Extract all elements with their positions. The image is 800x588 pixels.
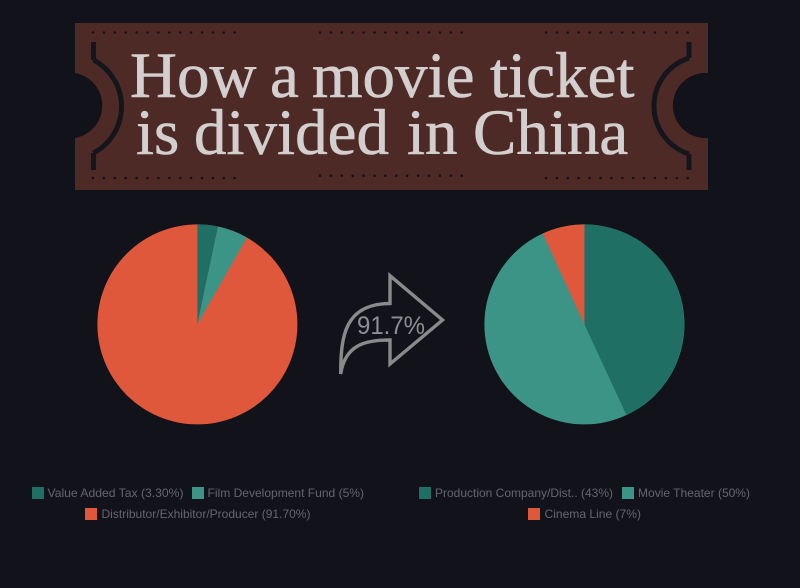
ticket banner [75, 23, 708, 190]
title: How [130, 40, 256, 112]
title: divided [194, 97, 389, 169]
legend: left chart: Film Development Fund (5%) [208, 486, 364, 500]
legend: right chart: Production Company/Dist.. (43%) [435, 486, 613, 500]
pie chart: ticket split [97, 224, 297, 424]
title: a [270, 40, 299, 112]
title: China [473, 97, 628, 169]
title [130, 40, 634, 169]
right ticket bracket [654, 42, 689, 170]
legend: right chart: Cinema Line (7%) [544, 507, 641, 521]
title: ticket [490, 40, 634, 112]
legend: left chart: Value Added Tax (3.30%) [48, 486, 184, 500]
title: movie [312, 40, 474, 112]
left ticket bracket [94, 42, 122, 170]
legend: left chart [32, 486, 364, 521]
legend: right chart [419, 486, 750, 521]
arrow with 91.7%: 91.7% [357, 312, 425, 340]
arrow with 91.7% [341, 276, 442, 374]
legend: right chart: Movie Theater (50%) [638, 486, 750, 500]
title: in [407, 97, 458, 169]
legend: left chart: Distributor/Exhibitor/Producer (91.70%) [102, 507, 310, 521]
pie chart: distributor split [484, 224, 684, 424]
title: is [136, 97, 179, 169]
